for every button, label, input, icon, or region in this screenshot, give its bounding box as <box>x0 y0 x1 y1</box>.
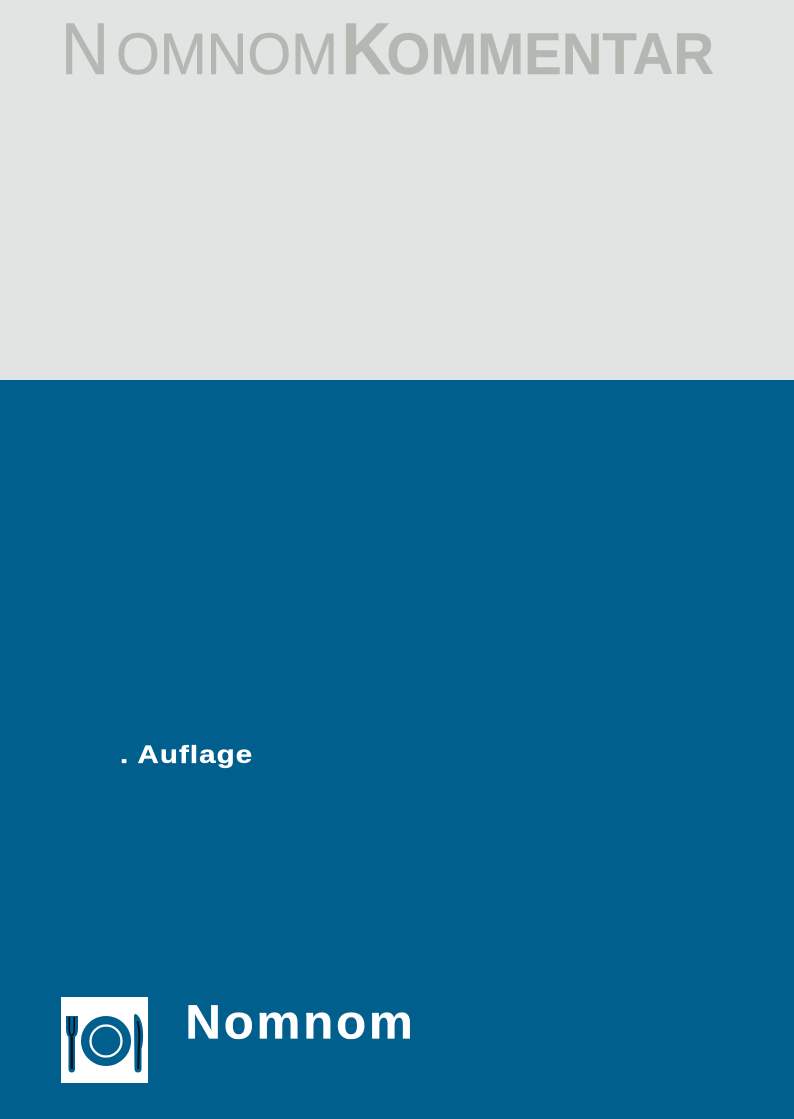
icon: knife <box>134 1014 143 1072</box>
title: OMMENTAR <box>386 22 714 87</box>
icon: plate <box>81 1016 131 1066</box>
panel: grey top band <box>0 0 794 380</box>
title <box>61 9 714 90</box>
publisher logo <box>61 997 148 1083</box>
icon: fork <box>66 1016 78 1072</box>
edition label: . Auflage <box>120 740 252 768</box>
logo background <box>61 997 148 1083</box>
publisher name: Nomnom <box>185 996 413 1049</box>
title: OMNOM <box>116 22 338 87</box>
title: N <box>61 9 109 90</box>
title: K <box>342 9 391 90</box>
